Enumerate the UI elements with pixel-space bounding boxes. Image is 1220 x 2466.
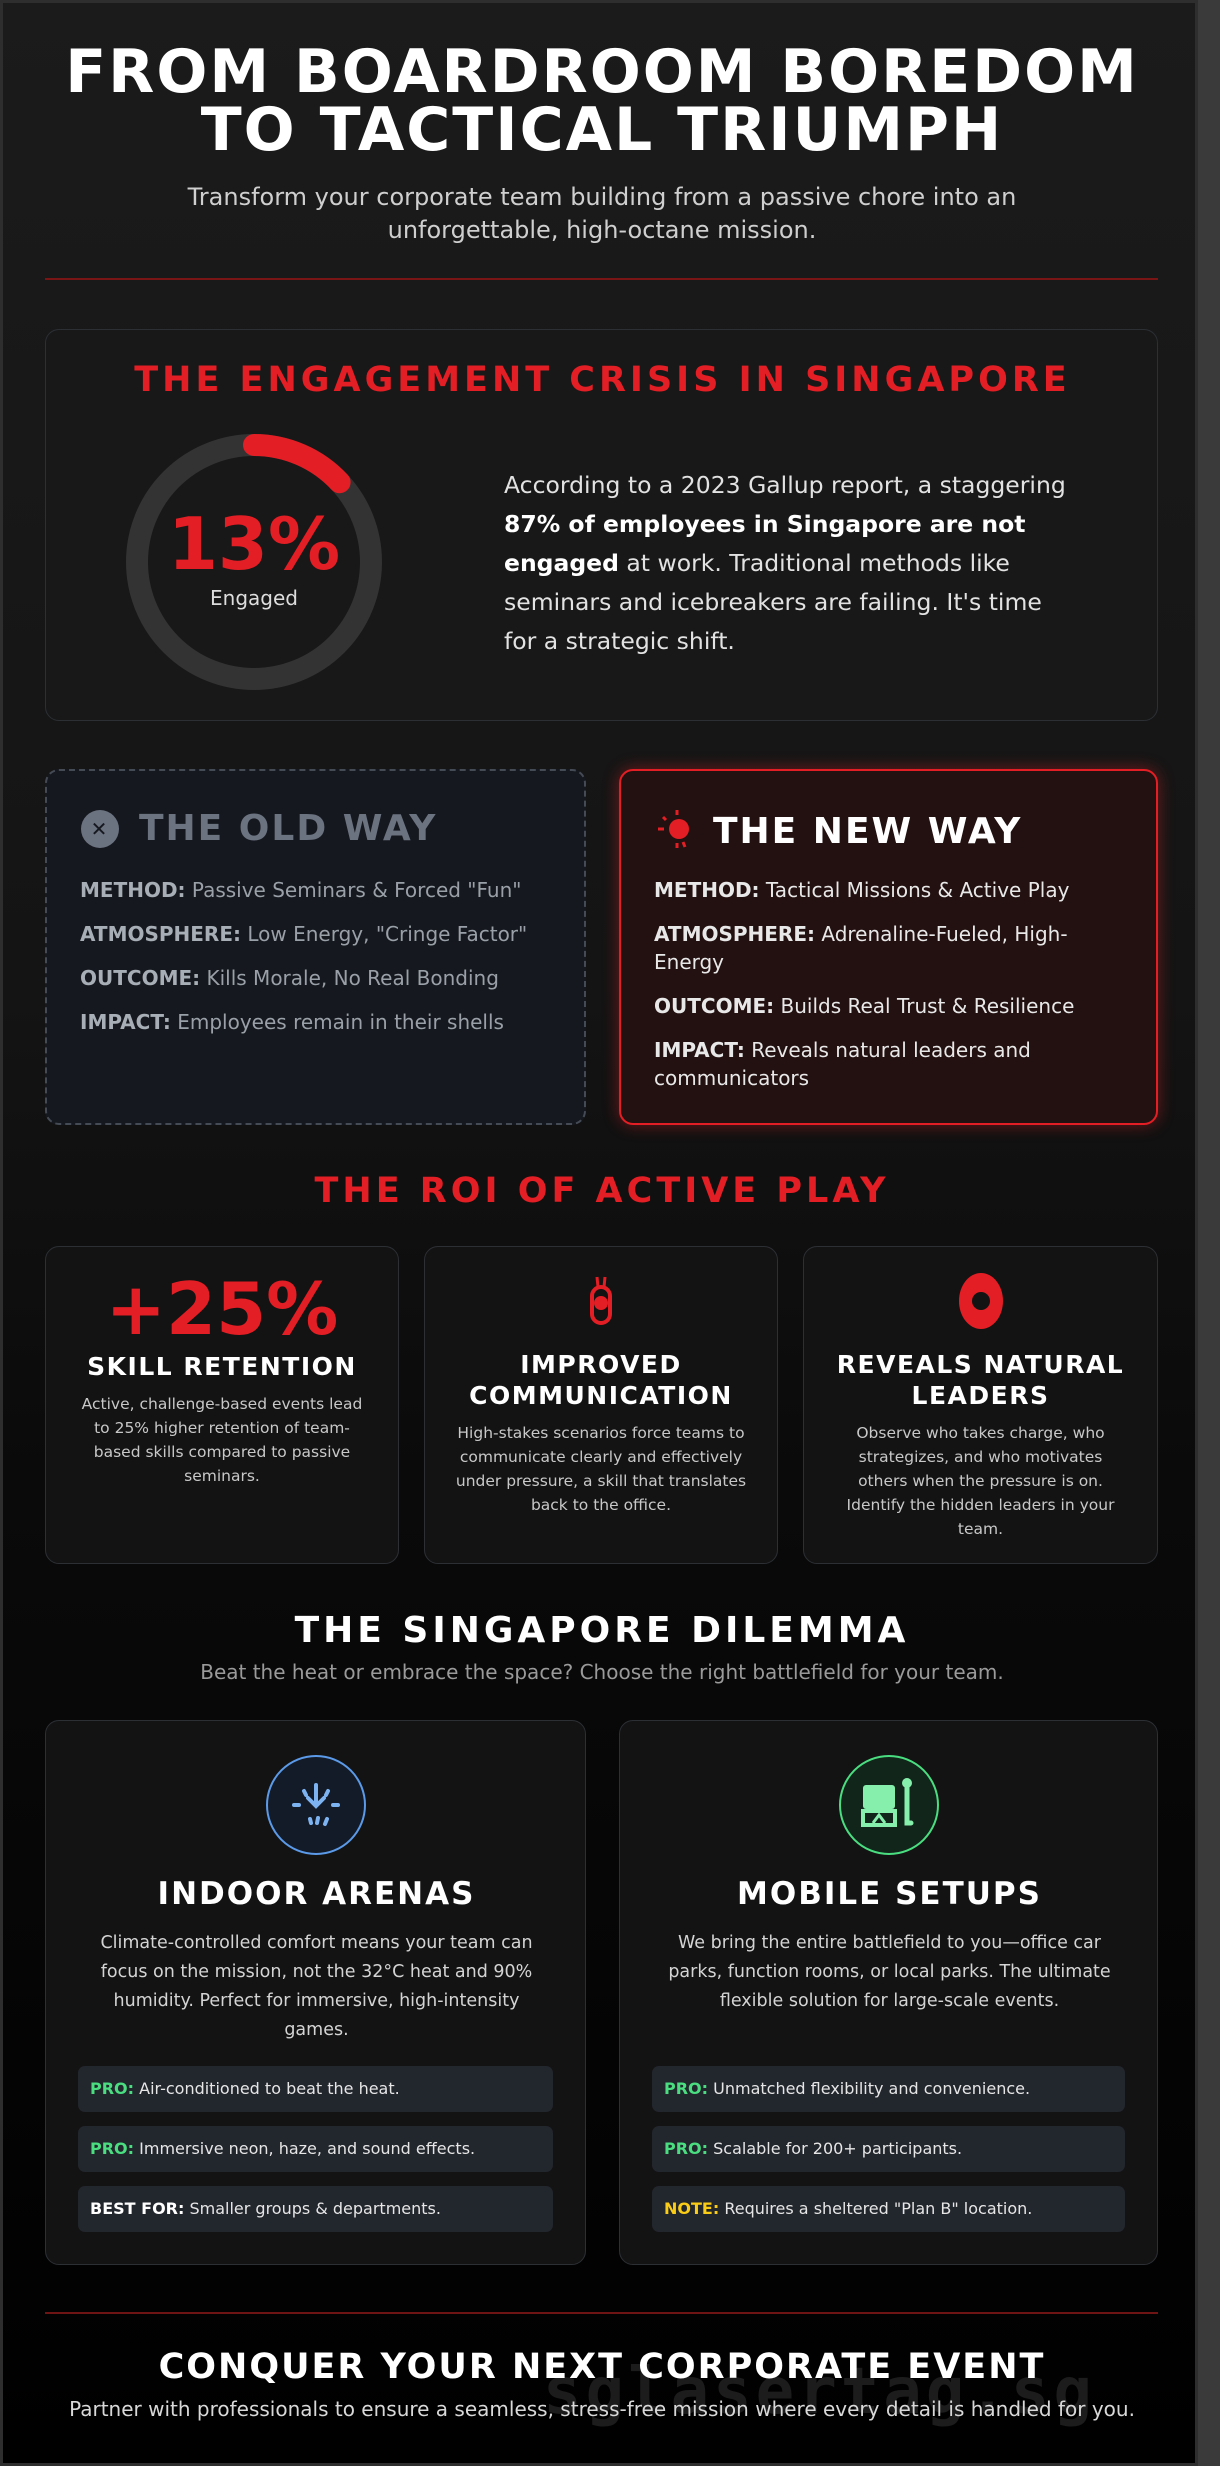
pill: pro flexibility: PRO: Unmatched flexibility and convenience. [664, 2079, 1030, 2098]
card: skill retention [45, 1246, 399, 1564]
card: leaders: LEADERS [912, 1381, 1049, 1410]
heading: ROI: THE ROI OF ACTIVE PLAY [315, 1171, 889, 1211]
heading: old way: ✕ [91, 817, 109, 841]
list: new way attributes: OUTCOME: Builds Real Trust & Resilience [654, 994, 1074, 1018]
list: new way attributes [654, 878, 1074, 1090]
pill: pro flexibility [652, 2066, 1125, 2112]
list: old way attributes: OUTCOME: Kills Morale, No Real Bonding [80, 966, 499, 990]
pill: best for: BEST FOR: Smaller groups & departments. [90, 2199, 441, 2218]
pill: pro air-con: PRO: Air-conditioned to beat the heat. [90, 2079, 400, 2098]
subheading: dilemma: Beat the heat or embrace the space? Choose the right battlefield for your team. [200, 1660, 1004, 1684]
list: new way attributes: METHOD: Tactical Missions & Active Play [654, 878, 1069, 902]
heading: old way: THE OLD WAY [139, 808, 437, 849]
card: skill retention: SKILL RETENTION [87, 1352, 357, 1381]
heading: Singapore dilemma: THE SINGAPORE DILEMMA [295, 1610, 909, 1651]
card: communication: COMMUNICATION [469, 1381, 733, 1410]
text: engagement statistic: for a strategic shift. [504, 627, 735, 655]
card: skill retention: +25% [106, 1267, 338, 1351]
pill: pro scalable: PRO: Scalable for 200+ participants. [664, 2139, 962, 2158]
panel: engagement crisis [45, 329, 1158, 721]
title [65, 37, 1139, 165]
subtitle: Transform your corporate team building from a passive chore into an [188, 183, 1016, 211]
heading: CTA: CONQUER YOUR NEXT CORPORATE EVENT [159, 2347, 1045, 2387]
subtitle [188, 183, 1016, 244]
panel: old way [45, 769, 586, 1125]
card: leaders [803, 1246, 1158, 1564]
title: FROM BOARDROOM BOREDOM [65, 37, 1139, 107]
donut chart: 13% engaged: 13% [168, 502, 340, 586]
pill: pro scalable [652, 2126, 1125, 2172]
icon: mobile setup [839, 1755, 939, 1855]
panel: indoor arenas [45, 1720, 586, 2265]
panel: new way [619, 769, 1158, 1125]
card: communication [424, 1246, 778, 1564]
list: new way attributes: ATMOSPHERE: Adrenaline-Fueled, High-Energy [654, 922, 1068, 974]
list: old way attributes [80, 878, 527, 1034]
card: skill retention: Active, challenge-based events lead to 25% higher retention of team-based skills compared to passive seminars. [82, 1395, 362, 1485]
list: old way attributes: METHOD: Passive Seminars & Forced "Fun" [80, 878, 521, 902]
list: old way attributes: ATMOSPHERE: Low Energy, "Cringe Factor" [80, 922, 527, 946]
icon: climate [266, 1755, 366, 1855]
donut chart: 13% engaged [126, 434, 382, 690]
icon: radio [590, 1276, 612, 1325]
panel: indoor arenas: INDOOR ARENAS [158, 1876, 475, 1912]
text: engagement statistic: engaged at work. Traditional methods like [504, 549, 1010, 577]
card: leaders: REVEALS NATURAL [837, 1350, 1124, 1379]
pill: note [652, 2186, 1125, 2232]
icon: target [959, 1273, 1003, 1329]
card: communication: IMPROVED [520, 1350, 682, 1379]
panel: indoor arenas: Climate-controlled comfort means your team can focus on the mission, not the 32°C heat and 90% humidity. Perfect for immersive, high-intensity games. [100, 1933, 533, 2040]
list: new way attributes: IMPACT: Reveals natural leaders and communicators [654, 1038, 1031, 1090]
pill: pro air-con [78, 2066, 553, 2112]
pill: note: NOTE: Requires a sheltered "Plan B" location. [664, 2199, 1032, 2218]
text: engagement statistic [504, 471, 1066, 655]
panel: mobile setups: We bring the entire battlefield to you—office car parks, function rooms, or local parks. The ultimate flexible solution for large-scale events. [668, 1933, 1111, 2011]
heading: new way: THE NEW WAY [713, 811, 1022, 852]
text: engagement statistic: seminars and icebreakers are failing. It's time [504, 588, 1042, 616]
card: leaders: Observe who takes charge, who strategizes, and who motivates others when the pressure is on. Identify the hidden leaders in your team. [847, 1424, 1114, 1538]
text: engagement statistic: 87% of employees in Singapore are not [504, 510, 1026, 538]
watermark: sglasertag.sg [543, 2355, 1096, 2429]
panel: mobile setups: MOBILE SETUPS [737, 1876, 1042, 1912]
heading: engagement crisis: THE ENGAGEMENT CRISIS IN SINGAPORE [134, 360, 1071, 400]
text: CTA: Partner with professionals to ensure a seamless, stress-free mission where every detail is handled for you. [69, 2397, 1135, 2421]
panel: mobile setups [619, 1720, 1158, 2265]
subtitle: unforgettable, high-octane mission. [388, 216, 816, 244]
text: engagement statistic: According to a 2023 Gallup report, a staggering [504, 471, 1066, 499]
list: old way attributes: IMPACT: Employees remain in their shells [80, 1010, 504, 1034]
pill: best for [78, 2186, 553, 2232]
donut chart: 13% engaged: Engaged [210, 586, 298, 610]
title: TO TACTICAL TRIUMPH [201, 95, 1003, 165]
card: communication: High-stakes scenarios force teams to communicate clearly and effectively under pressure, a skill that translates back to the office. [456, 1424, 746, 1514]
pill: pro immersive: PRO: Immersive neon, haze, and sound effects. [90, 2139, 475, 2158]
pill: pro immersive [78, 2126, 553, 2172]
